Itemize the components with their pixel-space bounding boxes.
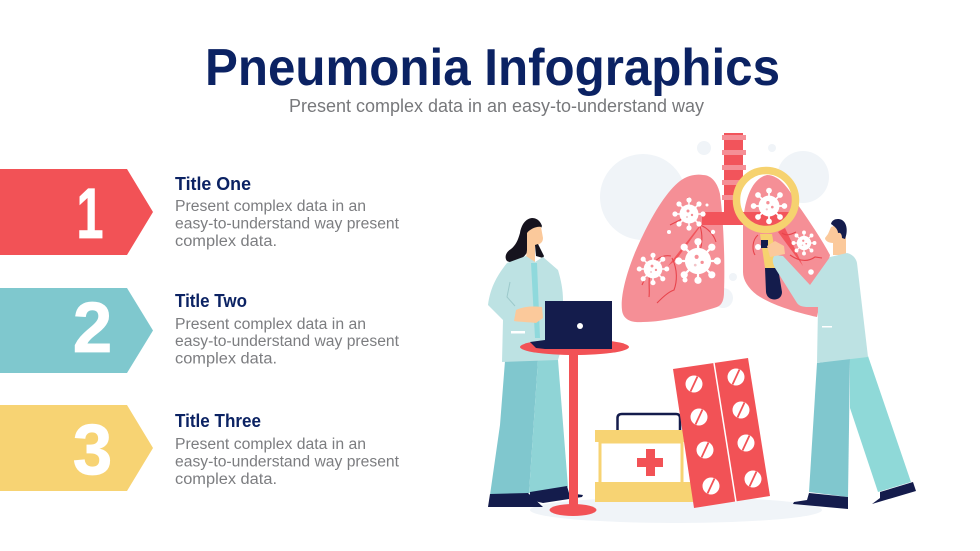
table with laptop (520, 301, 629, 516)
background circles (530, 141, 829, 523)
trousers (809, 358, 850, 497)
hair (506, 218, 542, 262)
hair (831, 219, 847, 239)
trachea (722, 133, 746, 213)
pocket mark (822, 326, 832, 328)
laptop (530, 301, 612, 349)
pill blister pack (673, 358, 770, 508)
text block three: complex data. (175, 471, 277, 488)
arrow: teal (0, 288, 153, 373)
coat (773, 253, 868, 363)
text block three (175, 436, 400, 488)
trousers (490, 360, 538, 495)
heading: title three: Title Three (175, 411, 261, 431)
number 1: 1 (76, 175, 104, 254)
neck and face (825, 224, 846, 255)
text block three: easy-to-understand way present (175, 454, 400, 470)
panel: item two (0, 288, 400, 373)
table (520, 339, 629, 516)
panel: item one (0, 169, 400, 255)
hair strand right (535, 244, 544, 258)
handle (618, 414, 680, 430)
hand (767, 241, 785, 257)
number 2: 2 (73, 289, 112, 368)
right lung (743, 175, 830, 317)
heading: title two: Title Two (175, 291, 247, 311)
subtitle: Present complex data in an easy-to-understand way (289, 96, 704, 116)
lens backdrop (736, 170, 796, 230)
text block one: easy-to-understand way present (175, 216, 400, 232)
pocket mark (511, 331, 525, 334)
coat inner strip (531, 263, 540, 338)
left lung (622, 175, 724, 322)
doctor: man (767, 219, 916, 509)
title: Pneumonia Infographics (205, 39, 780, 97)
airway branches (642, 197, 822, 303)
arrow: red (0, 169, 153, 255)
text block two: easy-to-understand way present (175, 333, 400, 350)
text block two: Present complex data in an (175, 316, 366, 333)
lungs (622, 133, 830, 322)
text block one: complex data. (175, 233, 277, 250)
coat (488, 256, 563, 362)
shoes (793, 493, 848, 509)
bronchi (668, 212, 803, 266)
hand (514, 306, 543, 323)
case (600, 442, 682, 484)
red cross (637, 449, 663, 476)
face and neck (526, 227, 543, 262)
number 3: 3 (73, 411, 112, 490)
lens ring (736, 170, 796, 230)
arrow: yellow (0, 405, 153, 491)
sleeve fold (507, 282, 515, 306)
text block two (175, 316, 400, 368)
doctor: woman (488, 218, 583, 507)
handle (760, 234, 778, 268)
heading: title one: Title One (175, 174, 251, 194)
text block three: Present complex data in an (175, 436, 366, 453)
first aid kit (595, 414, 693, 502)
panel: item three (0, 405, 400, 491)
shoes (488, 493, 543, 507)
text block one (175, 198, 400, 250)
virus particles (637, 188, 816, 285)
illustration: pneumonia diagnosis scene (488, 133, 916, 523)
text block two: complex data. (175, 350, 277, 368)
text block one: Present complex data in an (175, 198, 366, 215)
magnifying glass (736, 170, 796, 300)
